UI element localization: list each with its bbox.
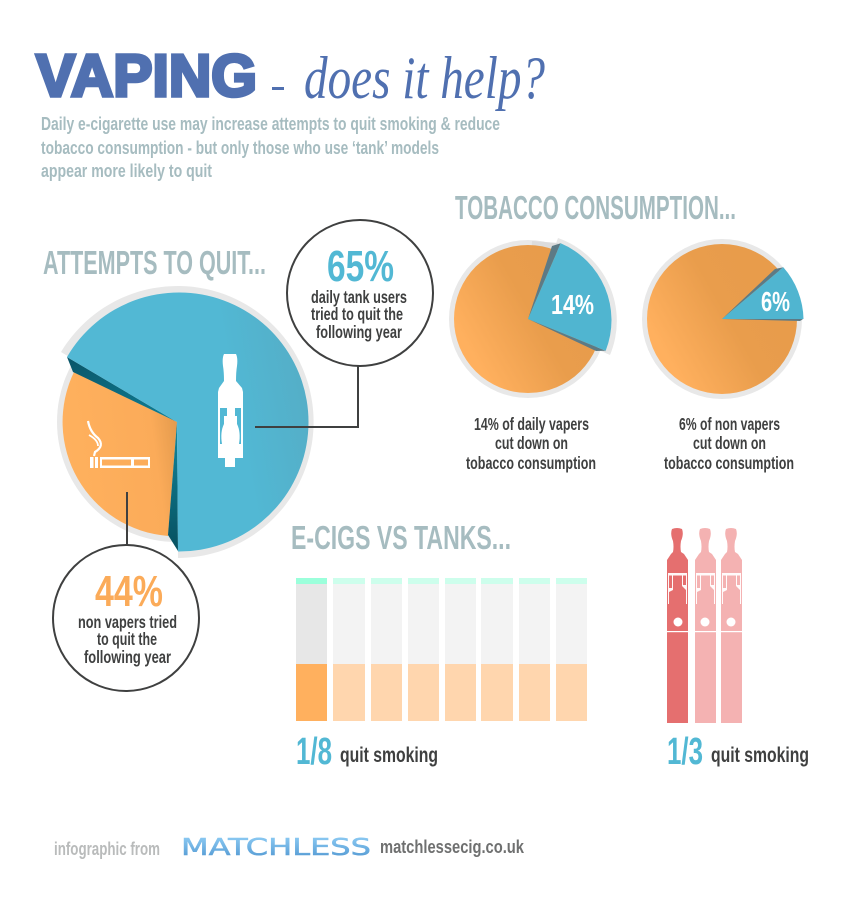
value label: 14% bbox=[551, 289, 594, 320]
callout: 44% non vapers: 44% bbox=[95, 567, 163, 616]
stat: 1/3 quit smoking: 1/3 bbox=[667, 731, 703, 773]
caption: 14% daily vapers: tobacco consumption bbox=[466, 453, 596, 473]
heading: attempts to quit: ATTEMPTS TO QUIT... bbox=[43, 244, 266, 281]
caption: 14% daily vapers: cut down on bbox=[495, 433, 568, 453]
stat: 1/8 quit smoking: quit smoking bbox=[340, 744, 438, 767]
stat: 1/8 quit smoking: 1/8 bbox=[296, 731, 332, 773]
title: does it help? bbox=[304, 45, 545, 111]
callout: 65% daily tank users: 65% bbox=[327, 242, 394, 291]
callout: 65% daily tank users bbox=[255, 220, 433, 427]
footer bbox=[54, 835, 525, 861]
intro text: Daily e-cigarette use may increase attempts to quit smoking & reduce bbox=[41, 114, 500, 134]
footer: infographic from bbox=[54, 839, 160, 859]
callout: 65% daily tank users: following year bbox=[316, 322, 402, 342]
intro text: appear more likely to quit bbox=[41, 161, 212, 181]
caption: 6% non vapers: cut down on bbox=[693, 433, 766, 453]
orange slice: non vapers bbox=[63, 372, 177, 536]
fold shadows bbox=[67, 357, 178, 551]
blue slice: daily tank users bbox=[67, 293, 309, 552]
logo: matchless: MATCHLESS bbox=[181, 835, 371, 861]
callout: 44% non vapers: non vapers tried bbox=[78, 612, 177, 632]
bar chart: 1/8 e-cigs bbox=[296, 578, 587, 721]
tank pictogram: 1/3 bbox=[667, 528, 742, 723]
footer: matchlessecig.co.uk bbox=[380, 837, 525, 857]
intro text: tobacco consumption - but only those who use ‘tank’ models bbox=[41, 138, 439, 158]
pie chart: 14% daily vapers bbox=[449, 238, 617, 398]
callout: 44% non vapers: following year bbox=[84, 647, 171, 667]
caption: 6% non vapers bbox=[664, 414, 794, 473]
callout: 44% non vapers bbox=[53, 492, 199, 691]
callout: 44% non vapers: to quit the bbox=[97, 629, 157, 649]
intro text bbox=[41, 114, 500, 181]
stat: 1/3 quit smoking: quit smoking bbox=[711, 744, 809, 767]
pie chart: attempts to quit bbox=[57, 286, 314, 558]
pie chart: 6% non vapers bbox=[642, 239, 804, 399]
caption: 14% daily vapers: 14% of daily vapers bbox=[474, 414, 589, 434]
callout: 65% daily tank users: daily tank users bbox=[311, 287, 407, 307]
caption: 6% non vapers: tobacco consumption bbox=[664, 453, 794, 473]
caption: 6% non vapers: 6% of non vapers bbox=[679, 414, 780, 434]
caption: 14% daily vapers bbox=[466, 414, 596, 473]
title: VAPING bbox=[36, 43, 257, 109]
callout: 65% daily tank users: tried to quit the bbox=[311, 304, 403, 324]
stat: 1/3 quit smoking bbox=[667, 731, 809, 773]
icon: cigarette bbox=[88, 421, 150, 468]
value label: 6% bbox=[761, 286, 790, 317]
title bbox=[36, 43, 545, 111]
stat: 1/8 quit smoking bbox=[296, 731, 438, 773]
heading: e-cigs vs tanks: E-CIGS VS TANKS... bbox=[291, 519, 511, 556]
icon: tank bbox=[218, 354, 243, 467]
